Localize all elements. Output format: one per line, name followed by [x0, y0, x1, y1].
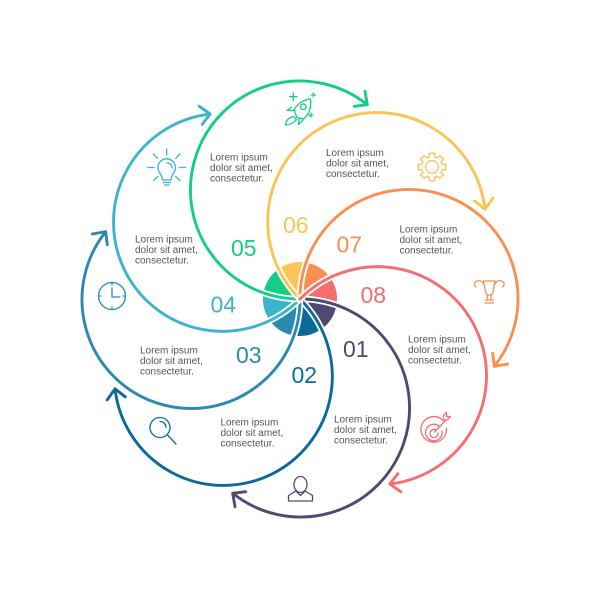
text block 02: dolor sit amet, — [220, 428, 283, 439]
text block 04: dolor sit amet, — [135, 245, 198, 256]
text block 04: Lorem ipsum — [135, 234, 193, 246]
number 01: 01 — [343, 336, 369, 362]
text block 01: consectetur. — [334, 436, 388, 446]
text block 02: consectetur. — [220, 438, 274, 450]
icon: target — [421, 412, 450, 442]
center pie — [263, 262, 337, 336]
text block 01: dolor sit amet, — [334, 425, 397, 436]
number 02: 02 — [292, 362, 317, 388]
number 03: 03 — [236, 342, 262, 368]
text block 07: consectetur. — [400, 246, 453, 256]
icon: rocket — [286, 93, 315, 125]
text block 08: Lorem ipsum — [408, 334, 466, 346]
icon: light bulb — [148, 149, 186, 185]
arrow 05 — [190, 81, 367, 299]
text block 03: consectetur. — [140, 366, 194, 378]
text block 05: dolor sit amet, — [210, 163, 273, 174]
number 06: 06 — [283, 212, 309, 238]
arrow 03 — [82, 232, 300, 409]
text block 06: dolor sit amet, — [326, 158, 389, 170]
text block 08: dolor sit amet, — [408, 345, 471, 356]
number 07: 07 — [336, 232, 362, 258]
icon: trophy — [474, 281, 504, 303]
number 05: 05 — [231, 235, 257, 261]
text block 05: Lorem ipsum — [210, 152, 268, 164]
arrow 01 — [233, 299, 410, 517]
text block 07: Lorem ipsum — [400, 224, 457, 236]
text block 05: consectetur. — [210, 174, 264, 184]
arrow 02 — [98, 251, 377, 531]
text block 08: consectetur. — [408, 356, 462, 366]
text block 07: dolor sit amet, — [400, 235, 462, 246]
icon: gear — [418, 153, 446, 181]
arrow 06 — [223, 67, 502, 347]
arrow 08 — [252, 222, 532, 501]
icon: magnifier — [150, 418, 176, 444]
arrow 04 — [68, 97, 348, 376]
text block 03: dolor sit amet, — [140, 356, 203, 367]
icon: clock — [98, 282, 126, 310]
text block 01: Lorem ipsum — [334, 414, 392, 426]
icon: person — [288, 476, 312, 501]
text block 04: consectetur. — [135, 256, 189, 266]
text block 06: consectetur. — [326, 169, 380, 180]
text block 02: Lorem ipsum — [220, 418, 278, 428]
text block 03: Lorem ipsum — [140, 346, 198, 356]
text block 06: Lorem ipsum — [326, 148, 384, 159]
number 08: 08 — [360, 282, 386, 308]
number 04: 04 — [210, 292, 236, 318]
arrow 07 — [300, 189, 518, 366]
